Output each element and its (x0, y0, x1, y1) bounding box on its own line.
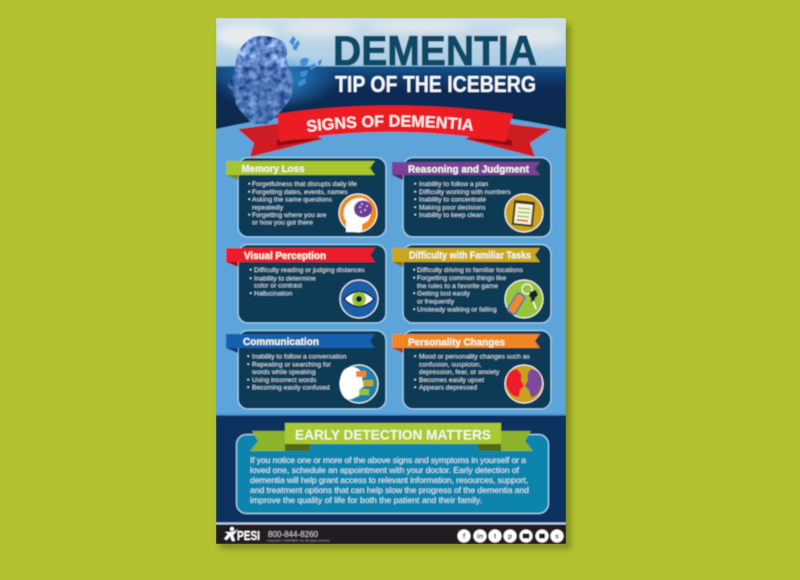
early detection text: If you notice one or more of the above signs and symptoms in yourself or a (250, 455, 526, 465)
panel: difficulty with familiar tasks: Getting lost easily (417, 291, 470, 298)
panel: reasoning and judgment: • (414, 197, 417, 204)
panel: difficulty with familiar tasks: • (413, 275, 416, 282)
icon: keys (505, 280, 543, 318)
panel: personality changes: Appears depressed (419, 385, 477, 392)
panel: difficulty with familiar tasks: • (413, 306, 416, 313)
icon: two faces (505, 365, 543, 403)
subtitle: TIP OF THE ICEBERG (335, 71, 536, 97)
panel: reasoning and judgment: • (414, 212, 417, 219)
header dark water (216, 66, 566, 129)
social icons: t (494, 534, 497, 540)
panel: reasoning and judgment: • (414, 189, 417, 196)
copyright: Copyright © 2018 PESI, Inc. All rights reserved. (267, 538, 330, 542)
icon: iceberg head (228, 36, 322, 124)
panel: communication: • (247, 354, 250, 361)
early detection text: and treatment options that can help slow the progress of the dementia and (250, 485, 529, 495)
panel: communication: Using incorrect words (252, 377, 317, 384)
panel: communication: Communication (243, 336, 319, 348)
panel: difficulty with familiar tasks: Unsteady walking or falling (417, 306, 497, 313)
panel: visual perception: Hallucination (254, 290, 293, 297)
panel: personality changes (392, 330, 551, 409)
panel: memory loss: Asking the same questions (252, 197, 333, 204)
early detection text: dementia will help grant access to relevant information, resources, support, (250, 475, 528, 485)
logo: PESI: PESI (237, 529, 260, 543)
poster (216, 18, 566, 544)
panel: memory loss: • (248, 212, 251, 219)
panel: visual perception: color or contrast (254, 283, 302, 290)
icon: eye (340, 280, 378, 318)
social icons: in (477, 534, 483, 540)
panel: visual perception (226, 244, 386, 323)
panel: memory loss: Memory Loss (242, 163, 305, 175)
footer (216, 522, 566, 544)
panel: personality changes: depression, fear, or anxiety (419, 369, 500, 376)
banner: signs of dementia (238, 104, 552, 158)
panel: memory loss: • (248, 197, 251, 204)
section: early detection (216, 414, 566, 524)
logo: PESI (224, 527, 260, 543)
banner: early detection matters: EARLY DETECTION MATTERS (295, 426, 491, 442)
panel: reasoning and judgment: Difficulty working with numbers (419, 189, 511, 196)
panel: difficulty with familiar tasks: Forgetting common things like (417, 275, 506, 282)
panel: personality changes: Personality Changes (408, 336, 505, 348)
panel: personality changes: • (414, 385, 417, 392)
panel: communication: • (247, 361, 250, 368)
panel: memory loss: or how you got there (252, 220, 313, 227)
panel: difficulty with familiar tasks: the rules to a favorite game (417, 283, 498, 290)
panel: memory loss: Forgetting where you are (252, 212, 327, 219)
banner: early detection matters (250, 423, 533, 451)
panel: communication: Repeating or searching for (252, 361, 332, 368)
panel: personality changes: Becomes easily upset (419, 377, 484, 384)
panel: communication: Inability to follow a conversation (252, 354, 347, 361)
early detection text: loved one, schedule an appointment with your doctor. Early detection of (250, 465, 520, 475)
panel: difficulty with familiar tasks: Difficulty with Familiar Tasks (409, 250, 531, 262)
panel: reasoning and judgment: Inability to follow a plan (419, 181, 488, 188)
social icons: p (508, 534, 512, 540)
panel: difficulty with familiar tasks: Difficulty driving to familiar locations (417, 267, 523, 274)
panel: reasoning and judgment: • (414, 204, 417, 211)
panel: reasoning and judgment: Inability to concentrate (419, 197, 486, 204)
panel: memory loss: repeatedly (252, 204, 284, 211)
panel: early detection text box (236, 434, 548, 514)
social icons: f (463, 534, 466, 540)
panel: difficulty with familiar tasks (392, 244, 551, 323)
panel: visual perception: • (250, 290, 252, 297)
panel: memory loss: Forgetfulness that disrupts daily life (252, 181, 357, 188)
panel: difficulty with familiar tasks: • (413, 291, 416, 298)
icon: brain in head (339, 194, 377, 232)
panel: communication: • (247, 385, 250, 392)
icon: clipboard (505, 194, 543, 232)
social icons: s (555, 534, 559, 540)
panel: memory loss (226, 158, 386, 237)
panel: visual perception: Difficulty reading or judging distances (254, 267, 365, 274)
poster shadow (220, 24, 571, 549)
phone number: 800-844-8260 (268, 530, 319, 539)
panel: communication: words while speaking (251, 369, 316, 376)
icon: speech bubbles (340, 365, 378, 403)
panel: difficulty with familiar tasks: or frequently (417, 298, 455, 305)
panel: memory loss: • (248, 189, 251, 196)
panel: personality changes: confusion, suspicion, (419, 361, 481, 368)
panel: personality changes: • (414, 377, 417, 384)
panel: difficulty with familiar tasks: • (413, 267, 416, 274)
panel: reasoning and judgment: Inability to keep clean (419, 212, 484, 219)
panel: reasoning and judgment: • (414, 181, 417, 188)
panel: visual perception: Inability to determine (254, 275, 316, 282)
early detection text: improve the quality of life for both the patient and their family. (250, 495, 482, 505)
panel: reasoning and judgment (392, 158, 551, 237)
panel: personality changes: Mood or personality changes such as (419, 354, 530, 361)
panel: communication (226, 330, 386, 409)
social icons (458, 530, 564, 542)
header sky with clouds (215, 18, 566, 66)
panel: visual perception: • (250, 275, 252, 282)
title: DEMENTIA (333, 27, 537, 74)
panel: communication: • (247, 377, 250, 384)
panel: personality changes: • (414, 354, 417, 361)
panel: memory loss: Forgetting dates, events, names (252, 189, 348, 196)
panel: visual perception: Visual Perception (244, 250, 326, 262)
panel: visual perception: • (250, 267, 252, 274)
panel: memory loss: • (248, 181, 251, 188)
banner: signs of dementia: SIGNS OF DEMENTIA (306, 114, 474, 132)
panel: reasoning and judgment: Making poor decisions (419, 204, 486, 211)
panel: reasoning and judgment: Reasoning and Judgment (408, 164, 529, 176)
panel: communication: Becoming easily confused (252, 385, 330, 392)
